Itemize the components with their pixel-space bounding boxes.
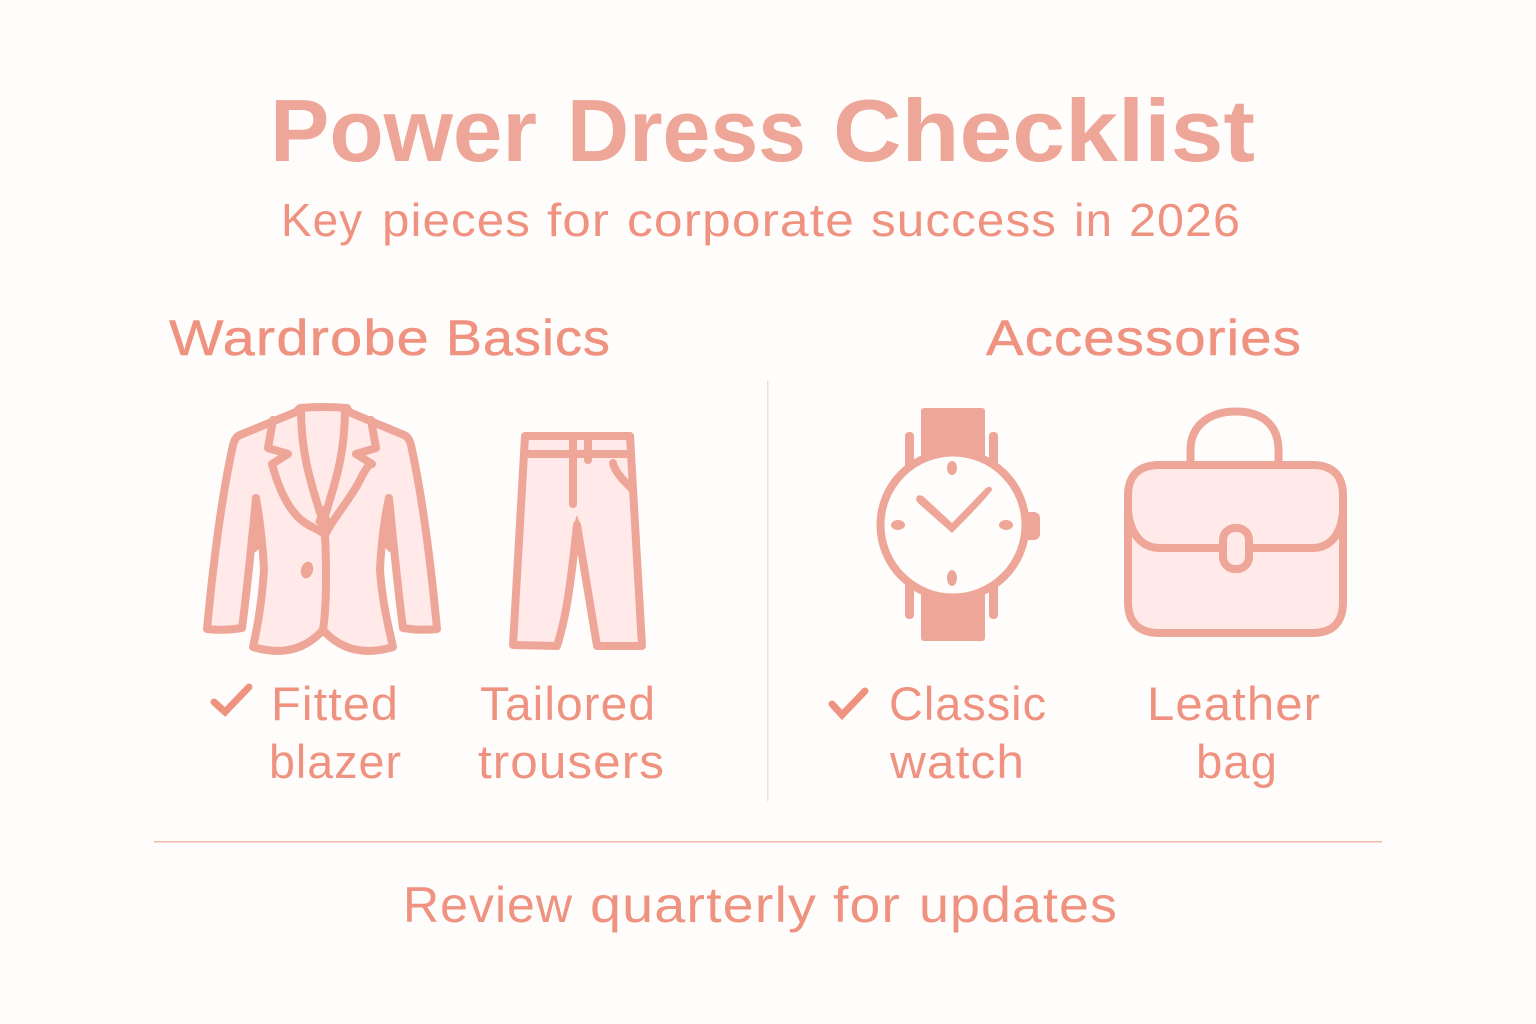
footer note: quarterly (590, 877, 817, 933)
icon: leather bag (1128, 412, 1343, 633)
icon: tailored trousers (513, 436, 642, 646)
icon: fitted blazer (207, 407, 437, 651)
heading: wardrobe basics: Wardrobe (169, 310, 430, 366)
title (270, 81, 1255, 180)
heading: wardrobe basics (169, 310, 611, 366)
icon: classic watch (880, 408, 1040, 641)
title: Dress (567, 81, 806, 180)
label: tailored trousers: Tailored (480, 677, 656, 730)
heading: wardrobe basics: Basics (446, 310, 611, 366)
footer note: Review (403, 877, 573, 933)
footer note: updates (919, 877, 1118, 933)
subtitle: in (1074, 194, 1113, 246)
subtitle: corporate (627, 194, 855, 246)
label: classic watch: Classic (889, 677, 1047, 730)
footer note: for (833, 877, 901, 933)
subtitle: pieces (382, 194, 531, 246)
panel: wardrobe basics (207, 407, 665, 788)
label: leather bag: bag (1196, 735, 1278, 788)
label: tailored trousers: trousers (478, 735, 665, 788)
subtitle: Key (281, 194, 363, 246)
panel: accessories (832, 408, 1343, 788)
footer note (403, 877, 1118, 933)
heading: accessories: Accessories (986, 310, 1302, 366)
label: tailored trousers (478, 677, 665, 788)
title: Power (270, 81, 537, 180)
label: fitted blazer (269, 677, 402, 788)
label: classic watch (889, 677, 1047, 788)
subtitle: success (871, 194, 1057, 246)
label: fitted blazer: blazer (269, 735, 402, 788)
title: Checklist (833, 81, 1255, 180)
subtitle: 2026 (1129, 194, 1241, 246)
subtitle: for (547, 194, 610, 246)
label: fitted blazer: Fitted (271, 677, 399, 730)
label: classic watch: watch (889, 735, 1025, 788)
label: leather bag (1147, 677, 1321, 788)
subtitle (281, 194, 1241, 246)
checkmark: classic watch (832, 691, 865, 715)
checkmark: fitted blazer (214, 687, 249, 712)
label: leather bag: Leather (1147, 677, 1321, 730)
